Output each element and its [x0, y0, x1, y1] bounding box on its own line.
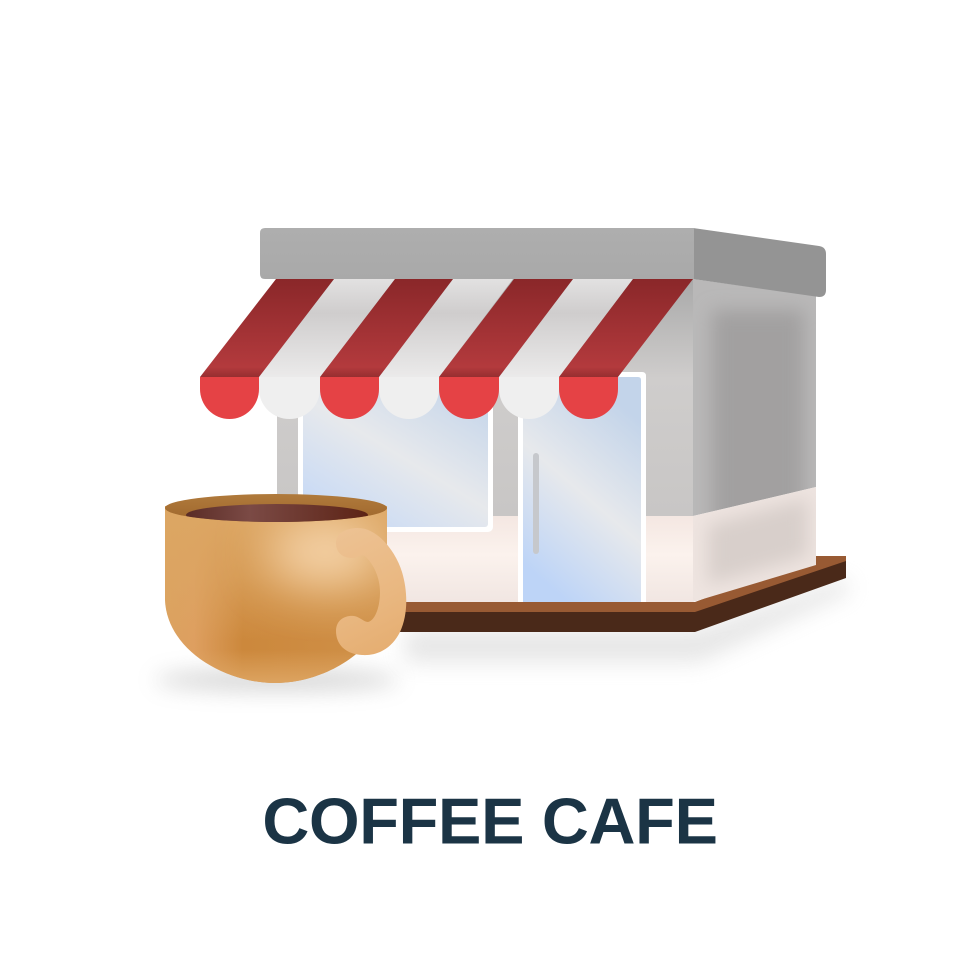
roof: [260, 228, 826, 297]
window: [298, 370, 493, 532]
awning scallops: [259, 377, 320, 419]
building side base: [693, 487, 816, 602]
illustration: coffee cafe: [160, 228, 846, 844]
awning: [200, 279, 693, 419]
coffee surface: [186, 504, 368, 522]
door: [518, 372, 646, 602]
building side wall: [693, 279, 816, 516]
cup handle: [336, 528, 406, 655]
awning white stripes: [259, 279, 395, 377]
roof front: [260, 228, 694, 279]
floor platform: [400, 556, 846, 632]
title: COFFEE CAFE: [262, 784, 718, 858]
door handle: [533, 453, 539, 554]
building: [277, 279, 816, 602]
ground shadow: [155, 578, 850, 691]
building front base: [277, 516, 693, 602]
awning red stripes: [200, 279, 334, 377]
cup body: [165, 500, 387, 684]
coffee cup: [165, 494, 406, 684]
cup rim opening: [165, 494, 387, 522]
building front wall: [277, 279, 693, 517]
roof side: [693, 228, 826, 297]
